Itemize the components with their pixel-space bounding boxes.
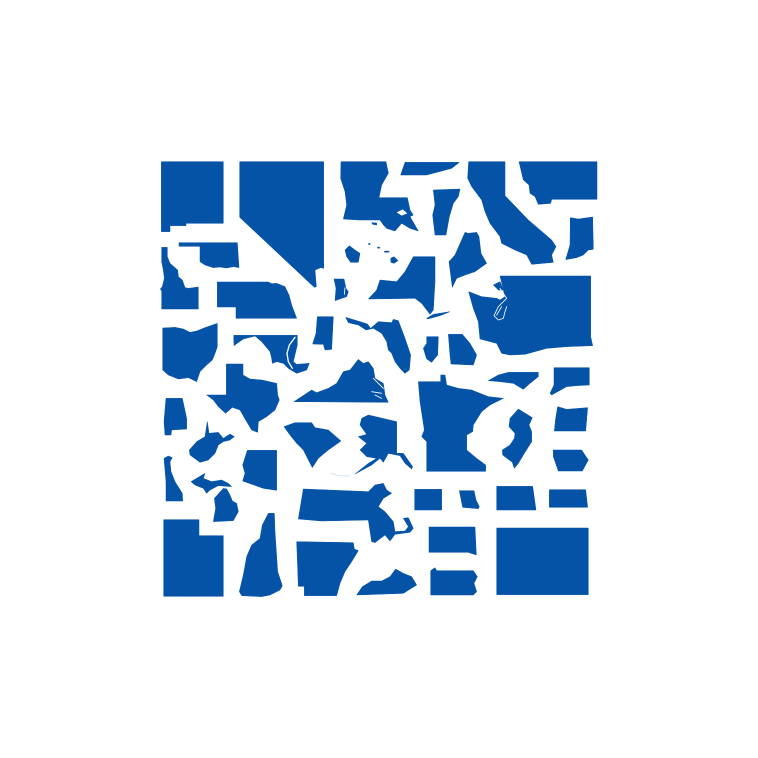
state: Ohio <box>163 323 217 382</box>
state: Michigan <box>191 473 238 522</box>
state: New Jersey <box>502 409 532 468</box>
state: Nevada <box>240 162 324 287</box>
state: New York <box>368 257 450 319</box>
state: Maryland <box>234 335 309 373</box>
state: West Virginia <box>189 422 234 462</box>
state: Kentucky <box>357 569 417 595</box>
state: Florida <box>346 317 411 373</box>
state: Kansas <box>549 490 588 507</box>
state: Rhode Island <box>334 279 348 301</box>
state: Montana <box>519 162 597 204</box>
state: Louisiana <box>341 162 418 231</box>
state: Pennsylvania <box>431 568 477 595</box>
state: Colorado <box>415 489 442 510</box>
state: Minnesota <box>418 375 503 471</box>
state: California <box>468 162 556 264</box>
state: Connecticut <box>550 368 589 395</box>
state: Wyoming <box>497 528 588 595</box>
state: New Hampshire <box>239 513 282 597</box>
state: Maine <box>449 232 487 287</box>
state: Nebraska <box>217 282 297 318</box>
state: Iowa <box>553 450 588 471</box>
state: Vermont <box>433 189 460 235</box>
state: Mississippi <box>313 317 333 350</box>
state: Delaware <box>164 456 183 501</box>
state: Virginia <box>294 359 388 402</box>
state: Massachusetts <box>298 483 413 543</box>
state: Arkansas <box>297 542 358 596</box>
state: Georgia <box>448 334 477 365</box>
state: Tennessee <box>401 162 459 175</box>
state: Indiana <box>566 217 593 260</box>
state: Wisconsin <box>345 246 360 262</box>
state: Texas <box>207 364 279 432</box>
state: Arizona <box>243 450 277 490</box>
state: Alabama <box>164 398 187 435</box>
state: New Mexico <box>161 162 223 232</box>
state: Oregon <box>554 407 588 431</box>
state: South Dakota <box>429 527 476 555</box>
state: Washington <box>469 276 593 355</box>
state: Hawaii <box>368 243 398 263</box>
state: South Carolina <box>284 423 341 468</box>
state: Oklahoma <box>179 243 239 268</box>
state: North Carolina <box>488 372 538 389</box>
state: Utah <box>164 520 223 596</box>
state: North Dakota <box>497 486 536 510</box>
state: Alaska <box>330 415 413 476</box>
state: Idaho <box>160 247 198 309</box>
state: Illinois <box>423 337 438 362</box>
state: Missouri <box>459 491 479 509</box>
